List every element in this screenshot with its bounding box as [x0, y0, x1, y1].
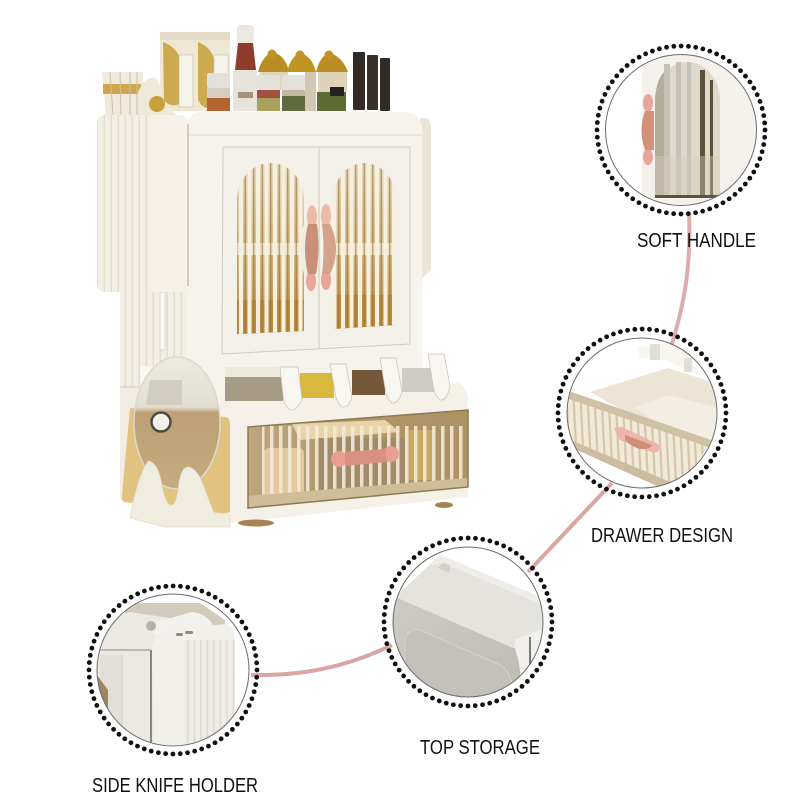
drawer interior — [590, 368, 716, 421]
handle detail — [643, 94, 653, 112]
drawer pink handle — [331, 446, 399, 467]
sauce bottle — [233, 25, 257, 111]
jar latches — [280, 354, 450, 410]
gold lid spice jars — [258, 50, 348, 111]
cabinet body — [187, 112, 422, 400]
wooden feet — [238, 502, 453, 526]
side knife holder — [97, 115, 188, 292]
dotted ring — [597, 46, 765, 214]
lens ring — [393, 547, 543, 697]
lower side body — [120, 280, 190, 500]
hinge — [152, 612, 213, 636]
connector: soft handle to drawer design — [670, 212, 689, 350]
arched window detail — [655, 62, 720, 198]
connector: drawer design to top storage — [528, 483, 612, 572]
spoon — [138, 78, 176, 116]
glass pot lid — [134, 357, 220, 489]
left arched window — [235, 160, 307, 336]
dotted ring — [89, 586, 257, 754]
cabinet corner — [98, 612, 170, 743]
lower drawer glass — [248, 410, 468, 512]
panel: soft handle detail — [597, 46, 765, 214]
ribbed holder — [196, 624, 235, 640]
gray front face — [394, 598, 520, 682]
panel: top storage detail — [384, 538, 552, 706]
panel: side knife holder detail — [89, 586, 261, 754]
label: drawer design: DRAWER DESIGN — [591, 525, 733, 547]
door divide — [318, 147, 320, 349]
cutting board — [122, 408, 230, 513]
rear right side panel — [420, 118, 431, 280]
right arched window — [333, 163, 396, 329]
ribbed drawer front — [568, 399, 710, 482]
label: top storage: TOP STORAGE — [420, 737, 540, 759]
chopsticks — [102, 72, 143, 115]
pasta boxes on top — [160, 32, 230, 111]
lower counter base — [220, 383, 468, 523]
panel: drawer design detail — [558, 329, 726, 497]
connector: top storage to side knife holder — [251, 645, 392, 675]
lens ring — [567, 338, 717, 488]
dotted ring — [384, 538, 552, 706]
shaker jars — [207, 73, 305, 111]
label: soft handle: SOFT HANDLE — [637, 230, 756, 252]
cabinet top cap line — [187, 134, 422, 136]
label: side knife holder: SIDE KNIFE HOLDER — [92, 775, 258, 797]
lens ring — [606, 54, 756, 206]
shadowed back — [125, 603, 225, 626]
lid stand — [130, 461, 230, 527]
pink door handles — [300, 204, 336, 291]
product illustration: storage cabinet — [97, 25, 468, 527]
drawer handle detail — [614, 427, 659, 453]
lens ring — [97, 594, 249, 746]
white side corner — [515, 630, 542, 675]
door panel — [222, 147, 410, 354]
dotted ring — [558, 329, 726, 497]
tray top — [395, 555, 545, 648]
knife block — [353, 52, 390, 111]
seasoning jars — [225, 367, 434, 401]
white latch detail — [638, 342, 700, 375]
